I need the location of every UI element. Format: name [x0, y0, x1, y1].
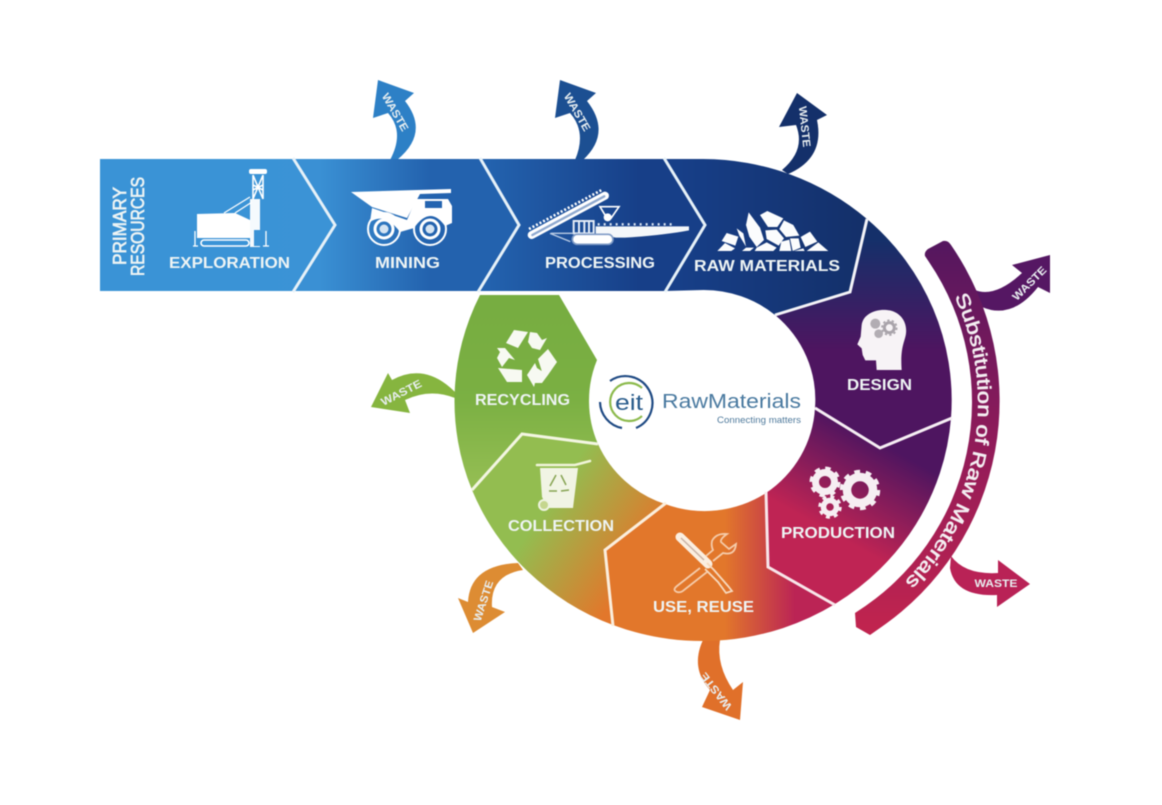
- segment: recycling: [454, 295, 598, 490]
- icon: conveyor crusher: [529, 190, 689, 244]
- waste arrow: recycling: WASTE: [379, 378, 424, 409]
- segment: production: [766, 408, 951, 604]
- waste arrow: processing: [555, 80, 599, 160]
- logo mark: [600, 376, 652, 428]
- icon: gears: [812, 468, 878, 517]
- label: primary resources: RESOURCES: [128, 177, 148, 276]
- waste arrow: mining: [373, 80, 416, 160]
- logo mark letters: eit: [615, 390, 643, 415]
- label: exploration: EXPLORATION: [169, 255, 290, 272]
- segment: use, reuse: [605, 493, 835, 641]
- label: primary resources: PRIMARY: [110, 187, 130, 265]
- label: recycling: RECYCLING: [475, 392, 570, 409]
- waste arrow: raw materials: WASTE: [796, 106, 812, 148]
- icon: head with gears: [857, 310, 906, 370]
- band: substitution of raw materials: Substitution of Raw Materials: [906, 292, 993, 588]
- waste arrow: mining: WASTE: [379, 91, 410, 134]
- logo wordmark: RawMaterials: [662, 391, 801, 413]
- logo: eit RawMaterials: [600, 376, 801, 428]
- icon: recycle arrows: [497, 330, 557, 387]
- waste arrow: raw materials: [779, 93, 827, 174]
- segment: raw materials: [664, 159, 867, 315]
- waste arrow: substitution bottom: [950, 556, 1030, 607]
- waste arrow: recycling: [371, 373, 455, 413]
- segment: exploration: [100, 159, 335, 291]
- band: substitution of raw materials: [854, 240, 1000, 636]
- label: use, reuse: USE, REUSE: [653, 599, 754, 616]
- segment: collection: [472, 434, 665, 625]
- label: design: DESIGN: [847, 377, 912, 394]
- icon: drill rig: [193, 169, 269, 247]
- logo tagline: Connecting matters: [717, 415, 801, 426]
- label: mining: MINING: [375, 255, 440, 272]
- segment: mining: [293, 159, 519, 291]
- label: primary resources: [110, 177, 148, 276]
- waste arrow: use, reuse: [698, 640, 743, 720]
- label: production: PRODUCTION: [781, 525, 895, 542]
- icon: rock pile: [717, 211, 828, 251]
- waste arrow: collection: [458, 563, 523, 633]
- waste arrow: use, reuse: WASTE: [698, 670, 735, 712]
- label: processing: PROCESSING: [545, 255, 655, 272]
- label: collection: COLLECTION: [508, 518, 614, 535]
- label: raw materials: RAW MATERIALS: [694, 258, 840, 275]
- segment: processing: [478, 159, 705, 291]
- icon: tools: [674, 534, 736, 593]
- waste arrow: processing: WASTE: [561, 91, 592, 134]
- waste arrow: substitution bottom: WASTE: [974, 578, 1018, 590]
- icon: recycling bin: [537, 461, 590, 510]
- waste arrow: substitution top: WASTE: [1010, 264, 1049, 303]
- icon: dump truck: [351, 189, 452, 245]
- waste arrow: substitution top: [975, 255, 1050, 311]
- waste arrow: collection: WASTE: [472, 579, 496, 623]
- segment: design: [775, 219, 952, 448]
